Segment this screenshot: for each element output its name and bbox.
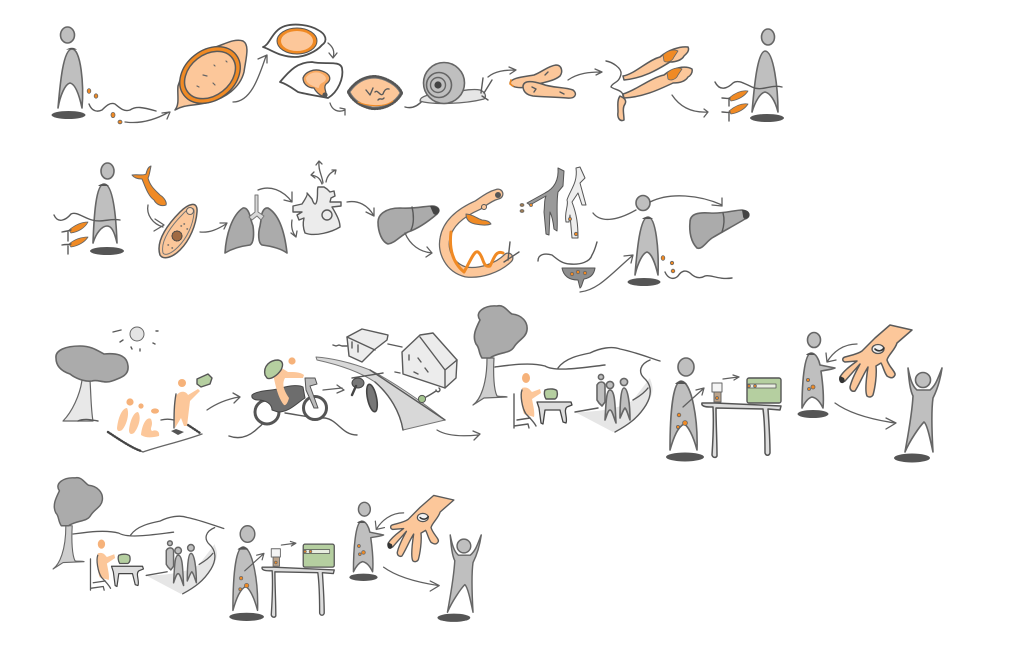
cured person cheering [894, 368, 942, 462]
row 3: mass treatment scene [56, 327, 480, 452]
sun [113, 327, 158, 351]
arrow [405, 233, 432, 257]
table with bottle [702, 383, 781, 457]
eggs and water [87, 89, 156, 124]
green medicine box [747, 378, 781, 403]
hand giving praziquantel [839, 325, 912, 397]
figure: person excreting eggs [52, 27, 86, 119]
waiting villagers [597, 374, 630, 423]
arrow [330, 103, 345, 115]
figure: person with liver and excreted eggs [593, 196, 732, 286]
arrow [580, 255, 633, 292]
arrow [328, 43, 337, 58]
person receiving treatment [798, 332, 835, 418]
orange cercaria [132, 166, 166, 206]
large egg cyst [169, 35, 251, 115]
tree in village [473, 306, 527, 405]
lungs [225, 195, 287, 253]
scene: village dispensing and treatment [473, 306, 942, 462]
arrow [437, 430, 480, 440]
schistosomulum oval [159, 204, 197, 258]
group on blanket with health worker [108, 374, 212, 452]
liver [378, 206, 439, 244]
arrow [323, 385, 344, 393]
intestine with eggs [538, 242, 597, 288]
arrow [672, 95, 708, 117]
arrow [200, 223, 227, 232]
arrow [258, 188, 292, 202]
emerging larva cyst [280, 62, 342, 98]
figure: person in water with larvae [54, 163, 124, 255]
person taking medication [666, 358, 704, 462]
snail [405, 62, 492, 108]
liver [690, 210, 750, 248]
arrow [347, 202, 374, 216]
arrow [826, 344, 857, 362]
motorcycle with rider [229, 357, 357, 438]
arrow [568, 69, 602, 80]
row 2: human infection and maturation [54, 161, 750, 292]
health worker at desk [514, 373, 572, 428]
arrow [488, 67, 516, 77]
hatching cyst [263, 25, 325, 57]
hairy miracidium [350, 78, 400, 107]
row 1: life cycle in the snail [52, 25, 784, 124]
road with motorcycle, houses and bush [316, 329, 457, 430]
heart [291, 161, 341, 237]
adult schistosome pair [444, 192, 519, 272]
tree [56, 346, 128, 421]
arrow [233, 55, 267, 102]
hills and river [495, 348, 660, 432]
fish and water with person [715, 29, 784, 122]
arrow [723, 375, 739, 380]
arrow [148, 205, 164, 231]
row 4: repeated treatment scene at reduced scale [53, 478, 481, 622]
rediae [510, 65, 575, 98]
arrow [835, 403, 896, 429]
cercariae [606, 47, 692, 121]
blood vessels with eggs [520, 167, 586, 238]
arrow [125, 112, 170, 123]
arrow [207, 393, 240, 410]
